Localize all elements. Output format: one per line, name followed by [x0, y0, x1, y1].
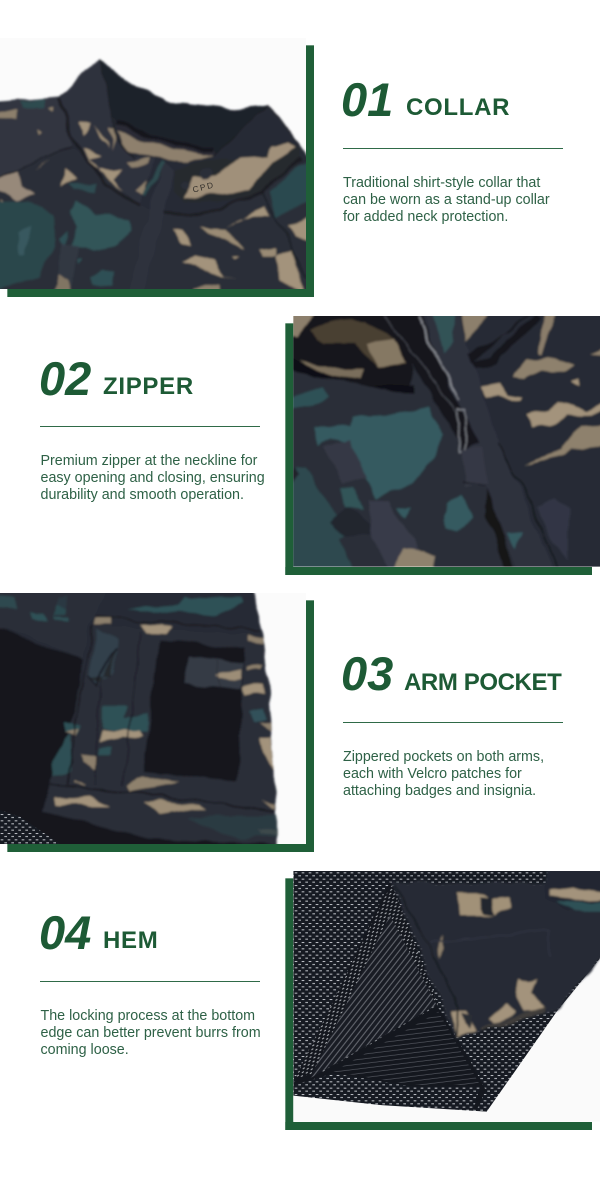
heading: 04 hem: HEM	[103, 927, 158, 954]
heading: 03 arm pocket	[341, 647, 562, 700]
text: zipper description: easy opening and closing, ensuring	[40, 470, 265, 486]
text: arm pocket description: Zippered pockets on both arms,	[343, 749, 544, 765]
heading: 02 zipper: 02	[39, 352, 91, 405]
heading: 01 collar	[341, 73, 510, 126]
text: hem description: coming loose.	[40, 1042, 129, 1058]
text: collar description: for added neck protection.	[343, 209, 508, 225]
text: collar description	[343, 175, 550, 225]
panel: hem photo with green frame	[285, 871, 600, 1130]
text: hem description	[40, 1008, 261, 1058]
heading: 03 arm pocket: 03	[341, 647, 393, 700]
panel: collar photo with green frame	[0, 45, 314, 297]
small printed collar mark: CPD	[191, 179, 216, 195]
text: hem description: edge can better prevent burrs from	[40, 1025, 261, 1041]
text: zipper description: durability and smooth operation.	[40, 487, 244, 503]
heading: 02 zipper: ZIPPER	[103, 373, 194, 400]
text: collar description: can be worn as a stand-up collar	[343, 192, 550, 208]
text: zipper description: Premium zipper at the neckline for	[40, 453, 257, 469]
heading: 04 hem: 04	[39, 906, 91, 959]
text: arm pocket description	[343, 749, 544, 799]
heading: 01 collar: COLLAR	[406, 94, 510, 121]
heading: 04 hem	[39, 906, 158, 959]
panel: zipper photo with green frame	[285, 316, 600, 575]
text: zipper description	[40, 453, 265, 503]
heading: 01 collar: 01	[341, 73, 393, 126]
heading: 02 zipper	[39, 352, 194, 405]
panel: arm pocket photo with green frame	[0, 593, 314, 852]
text: hem description: The locking process at the bottom	[40, 1008, 255, 1024]
text: arm pocket description: each with Velcro patches for	[343, 766, 522, 782]
text: collar description: Traditional shirt-style collar that	[343, 175, 540, 191]
text: arm pocket description: attaching badges and insignia.	[343, 783, 536, 799]
heading: 03 arm pocket: ARM POCKET	[404, 669, 561, 696]
